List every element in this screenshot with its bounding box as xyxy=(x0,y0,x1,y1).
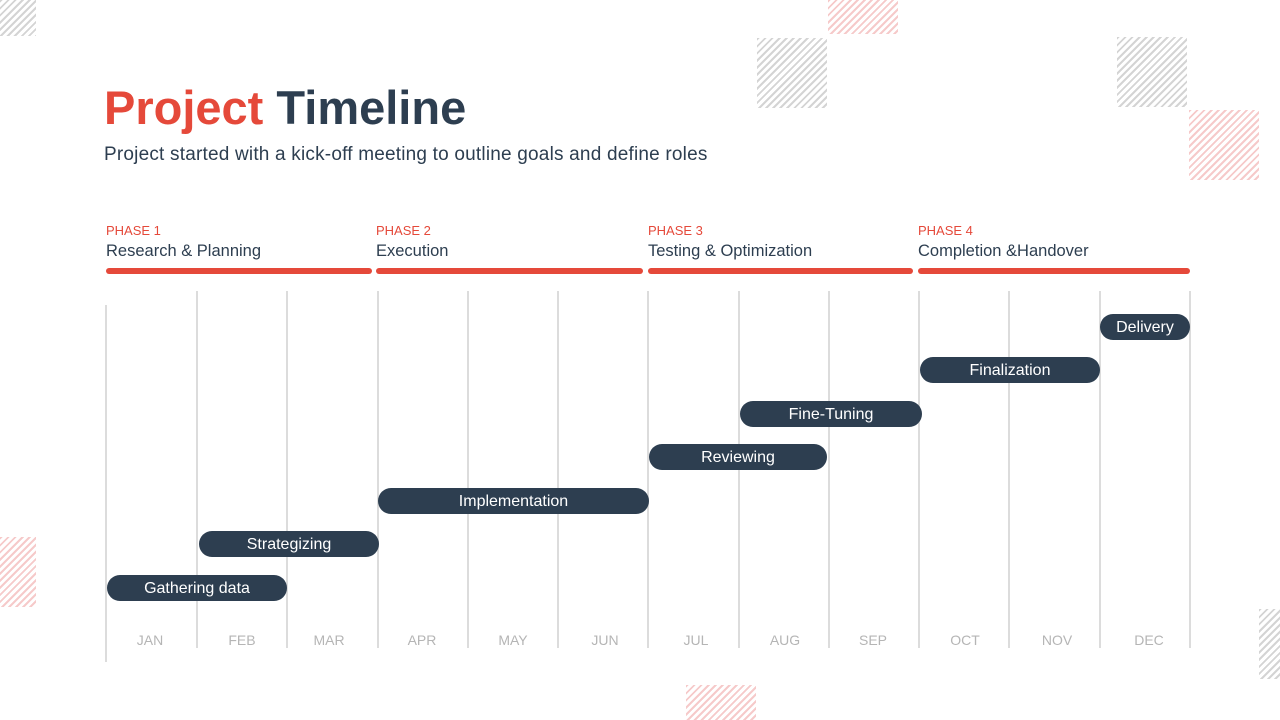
phase 3 xyxy=(648,223,812,260)
phase 4: Completion &Handover xyxy=(918,242,1089,260)
month labels: OCT xyxy=(950,632,980,648)
bar: delivery: Delivery xyxy=(1116,319,1174,336)
phase 2: PHASE 2 xyxy=(376,223,431,238)
phase 3: PHASE 3 xyxy=(648,223,703,238)
month labels: MAY xyxy=(498,632,528,648)
phase 1 xyxy=(106,223,261,260)
phase 2 xyxy=(376,223,448,260)
month labels: AUG xyxy=(770,632,800,648)
bar: reviewing: Reviewing xyxy=(701,449,775,466)
phase 4 xyxy=(918,223,1089,260)
month labels: SEP xyxy=(859,632,887,648)
phase 2: Execution xyxy=(376,242,448,260)
bar: fine-tuning xyxy=(740,401,922,427)
bar: fine-tuning: Fine-Tuning xyxy=(789,406,873,423)
phase 3: Testing & Optimization xyxy=(648,242,812,260)
title: Project Timeline xyxy=(104,81,466,134)
bar: finalization: Finalization xyxy=(970,362,1050,379)
month labels: JAN xyxy=(137,632,163,648)
phase 4: PHASE 4 xyxy=(918,223,973,238)
bar: reviewing xyxy=(649,444,827,470)
month labels: FEB xyxy=(228,632,256,648)
month labels: JUN xyxy=(591,632,619,648)
phase 1: PHASE 1 xyxy=(106,223,161,238)
subtitle: Project started with a kick-off meeting to outline goals and define roles xyxy=(104,144,708,165)
bar: gathering data: Gathering data xyxy=(144,580,250,597)
month labels xyxy=(137,632,1164,648)
month labels: NOV xyxy=(1042,632,1072,648)
bar: finalization xyxy=(920,357,1100,383)
month labels: DEC xyxy=(1134,632,1164,648)
bar: implementation xyxy=(378,488,649,514)
bar: gathering data xyxy=(107,575,287,601)
month labels: APR xyxy=(408,632,436,648)
bar: strategizing: Strategizing xyxy=(247,536,331,553)
month labels: MAR xyxy=(313,632,345,648)
bar: delivery xyxy=(1100,314,1190,340)
month labels: JUL xyxy=(684,632,708,648)
phase 1: Research & Planning xyxy=(106,242,261,260)
bar: strategizing xyxy=(199,531,379,557)
bar: implementation: Implementation xyxy=(459,493,568,510)
